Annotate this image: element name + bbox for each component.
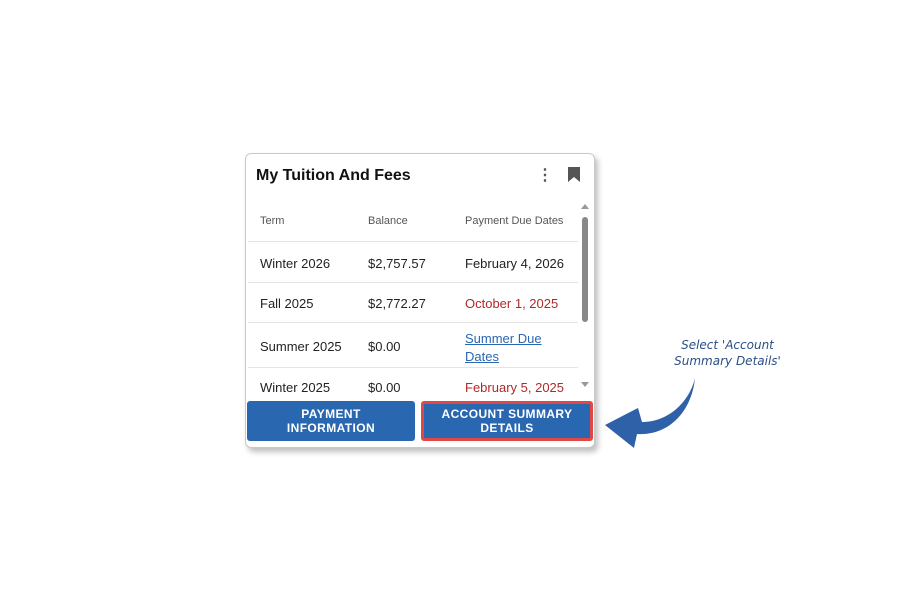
row: Summer 2025: Dates — [465, 349, 499, 364]
button: payment information: INFORMATION — [287, 421, 375, 435]
button: payment information: PAYMENT — [301, 407, 361, 421]
row: Summer 2025: $0.00 — [368, 339, 401, 354]
row: Winter 2026 — [260, 256, 564, 271]
callout text: Select 'Account — [681, 338, 774, 352]
row: Winter 2025: $0.00 — [368, 380, 401, 395]
row: Winter 2025 — [260, 380, 564, 395]
button: account summary details (highlighted) — [421, 401, 593, 441]
row: Winter 2026: February 4, 2026 — [465, 256, 564, 271]
row: Fall 2025 — [260, 296, 558, 311]
row: Fall 2025: October 1, 2025 — [465, 296, 558, 311]
table header: Balance — [368, 215, 408, 227]
button: account summary details (highlighted): DETAILS — [480, 421, 534, 435]
row: Fall 2025: $2,772.27 — [368, 296, 426, 311]
row: Summer 2025: Summer 2025 — [260, 339, 342, 354]
table header: Term — [260, 215, 284, 227]
icon: menu dots: ⋮ — [537, 167, 553, 184]
arrow — [605, 378, 695, 448]
row: Winter 2026: Winter 2026 — [260, 256, 330, 271]
row: Winter 2026: $2,757.57 — [368, 256, 426, 271]
row: Summer 2025 — [260, 331, 542, 364]
row: Winter 2025: February 5, 2025 — [465, 380, 564, 395]
panel: tuition card — [245, 153, 595, 448]
callout text: Summary Details' — [674, 354, 781, 368]
row: Summer 2025: Summer Due — [465, 331, 542, 346]
scrollbar — [581, 204, 589, 387]
title: My Tuition And Fees — [256, 167, 411, 184]
button: payment information — [247, 401, 415, 441]
icon: bookmark — [568, 167, 580, 182]
table header — [260, 215, 563, 227]
callout text — [674, 338, 781, 368]
row: Fall 2025: Fall 2025 — [260, 296, 313, 311]
table header: Payment Due Dates — [465, 215, 563, 227]
button: account summary details (highlighted): ACCOUNT SUMMARY — [442, 407, 572, 421]
row: Winter 2025: Winter 2025 — [260, 380, 330, 395]
